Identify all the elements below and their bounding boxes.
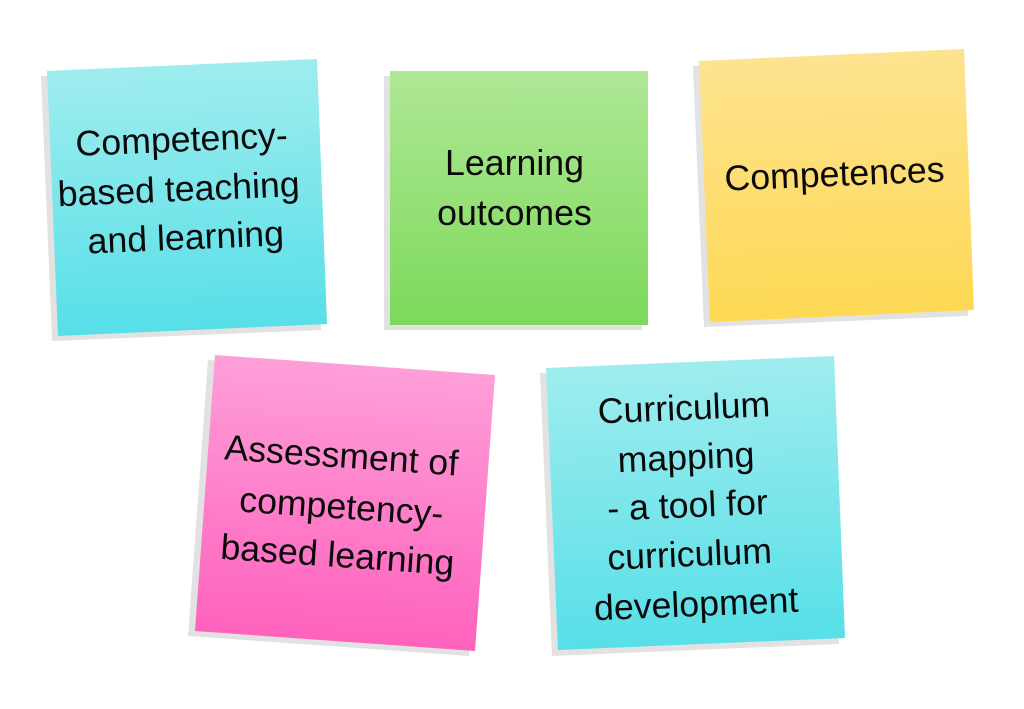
- label: curriculum mapping - a tool for curriculum development: mapping: [617, 434, 755, 480]
- label: curriculum mapping - a tool for curriculum development: development: [593, 580, 799, 628]
- label: learning outcomes: [437, 143, 592, 233]
- label: assessment of competency-based learning: Assessment of: [223, 427, 460, 484]
- label: competency-based teaching and learning: and learning: [87, 213, 285, 261]
- label: curriculum mapping - a tool for curriculum development: Curriculum: [597, 384, 771, 431]
- sticky note: competences: [693, 49, 974, 327]
- label: curriculum mapping - a tool for curriculum development: - a tool for: [606, 482, 769, 529]
- label: learning outcomes: outcomes: [437, 193, 592, 233]
- label: assessment of competency-based learning: competency-: [238, 480, 445, 534]
- sticky note: learning outcomes: [384, 71, 648, 330]
- label: competency-based teaching and learning: Competency-: [75, 115, 288, 164]
- sticky note: curriculum mapping: [540, 356, 845, 656]
- label: assessment of competency-based learning: based learning: [219, 527, 456, 583]
- label: competency-based teaching and learning: based teaching: [57, 164, 300, 214]
- label: learning outcomes: Learning: [445, 143, 584, 183]
- label: competences: Competences: [724, 149, 945, 199]
- label: assessment of competency-based learning: [216, 427, 463, 583]
- sticky note: assessment of competency-based learning: [188, 355, 495, 656]
- label: competency-based teaching and learning: [55, 115, 302, 263]
- label: curriculum mapping - a tool for curriculum development: [585, 383, 799, 628]
- sticky note: competency-based teaching and learning: [41, 59, 327, 341]
- label: curriculum mapping - a tool for curriculum development: curriculum: [606, 531, 773, 578]
